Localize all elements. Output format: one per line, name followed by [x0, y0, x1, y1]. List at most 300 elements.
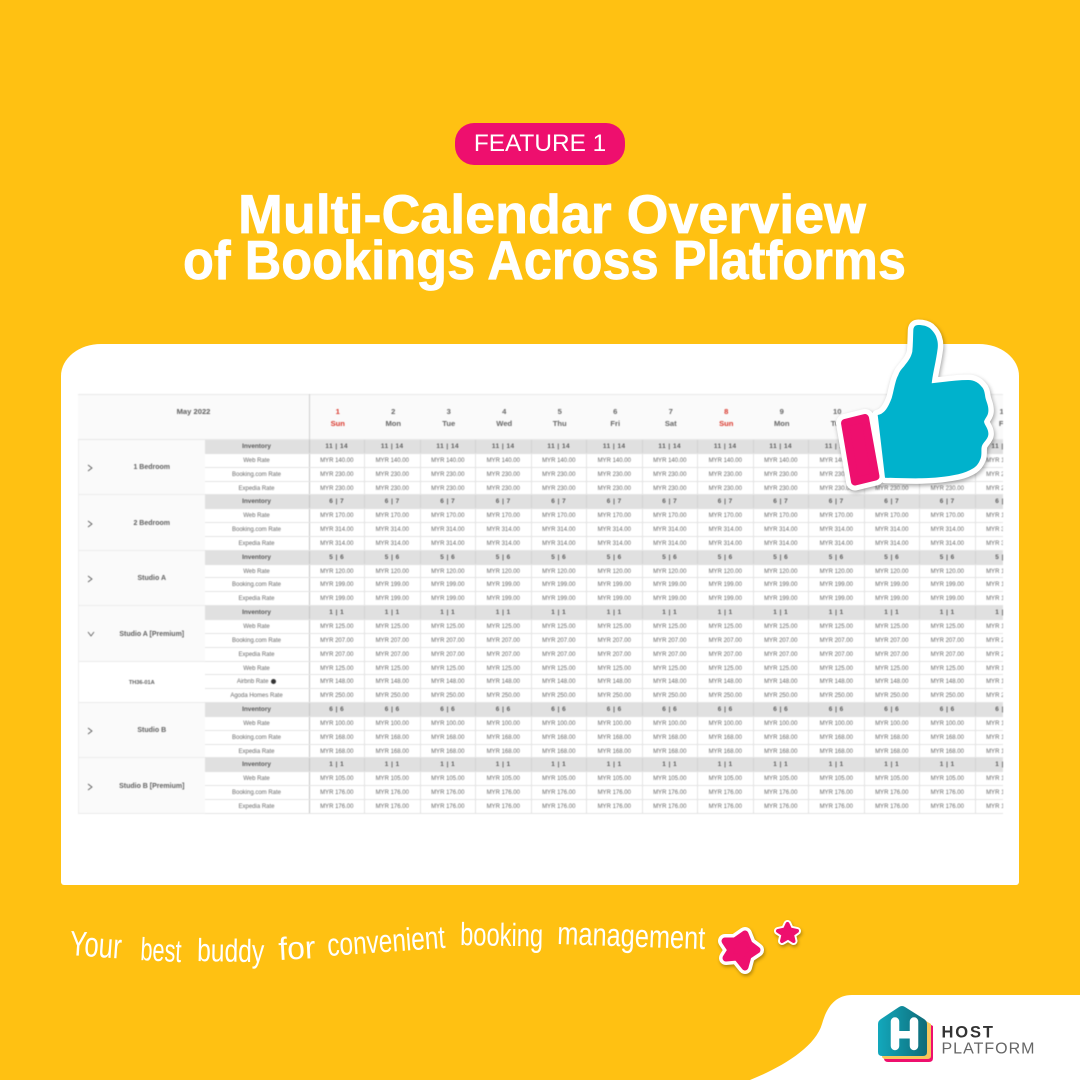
- room group: 2 Bedroom: 6 | 7: [718, 498, 733, 505]
- room group: Studio B Premium: MYR 176.00: [542, 804, 575, 810]
- room group: Studio B: MYR 100.00: [931, 721, 964, 727]
- room group: Studio A Premium: MYR 207.00: [431, 652, 464, 658]
- room group: Studio A: MYR 199.00: [598, 582, 631, 588]
- room group: 1 Bedroom: Expedia Rate: [238, 486, 275, 492]
- room group: 2 Bedroom: 2 Bedroom: [133, 520, 170, 527]
- room group: 1 Bedroom: MYR 140.00: [376, 458, 409, 464]
- room group: Studio A Premium: 1 | 1: [329, 609, 344, 616]
- room group: Studio A: MYR 199.00: [431, 582, 464, 588]
- room group: 1 Bedroom: 11 | 14: [436, 443, 459, 450]
- room group: Studio A: 5 | 6: [829, 554, 844, 561]
- room group: Studio A: MYR 199.00: [875, 582, 908, 588]
- room group: Studio B Premium: MYR 105.00: [431, 776, 464, 782]
- room group: 2 Bedroom: MYR 314.00: [875, 527, 908, 533]
- logo: Host Platform: HOST: [942, 1023, 993, 1041]
- room group: 1 Bedroom: MYR 230.00: [542, 472, 575, 478]
- room group: Studio A: 5 | 6: [773, 554, 788, 561]
- room group: Studio B: MYR 168.00: [542, 749, 575, 755]
- room group: Studio B: MYR 168.00: [376, 749, 409, 755]
- room group: Studio B Premium: MYR 105.00: [820, 776, 853, 782]
- room group: 1 Bedroom: MYR 230.00: [320, 472, 353, 478]
- room group: Studio B Premium: MYR 105.00: [598, 776, 631, 782]
- room group: 1 Bedroom: MYR 230.00: [376, 486, 409, 492]
- room group: Studio A: Booking.com Rate: [232, 582, 281, 588]
- room group: Studio A: MYR 199.00: [820, 582, 853, 588]
- room group: Studio B: MYR 168.00: [875, 735, 908, 741]
- room group: 1 Bedroom: 11 | 14: [381, 443, 404, 450]
- room group: Studio B: MYR 168.00: [875, 749, 908, 755]
- table header: Thu: [941, 418, 955, 428]
- room group: 1 Bedroom: MYR 140.00: [709, 458, 742, 464]
- room group: Studio B Premium: MYR 176.00: [487, 804, 520, 810]
- room group: Studio A Premium: MYR 207.00: [542, 652, 575, 658]
- room group: 2 Bedroom: 6 | 7: [940, 498, 955, 505]
- room group: TH36-01A: MYR 125.00: [764, 666, 797, 672]
- room group: Studio B: MYR 168.00: [931, 749, 964, 755]
- room group: Studio A Premium: MYR 125.00: [431, 624, 464, 630]
- room group: Studio A Premium: MYR 207.00: [653, 638, 686, 644]
- table header: Fri: [610, 418, 620, 428]
- room group: Studio A Premium: MYR 207.00: [931, 638, 964, 644]
- room group: TH36-01A: TH36-01A: [129, 680, 155, 686]
- room group: Studio B: [78, 702, 1004, 758]
- room group: TH36-01A: Airbnb Rate: [237, 679, 268, 685]
- table header: 7: [669, 407, 673, 416]
- room group: Studio A: MYR 120.00: [875, 569, 908, 575]
- room group: Studio B Premium: MYR 176.00: [653, 804, 686, 810]
- room group: Studio B: MYR 168.00: [653, 735, 686, 741]
- room group: Studio A Premium: MYR 207.00: [487, 652, 520, 658]
- table header: Wed: [885, 418, 901, 428]
- room group: Studio B: 6 | 6: [884, 706, 899, 713]
- room group: Studio B: Inventory: [242, 706, 271, 713]
- room group: 1 Bedroom: 1 Bedroom: [133, 464, 170, 471]
- room group: 1 Bedroom: MYR 230.00: [820, 486, 853, 492]
- room group: Studio A Premium: MYR 125.00: [875, 624, 908, 630]
- room group: Studio B: MYR 168.00: [764, 735, 797, 741]
- room group: Studio B Premium: MYR 176.00: [320, 804, 353, 810]
- room group: Studio A: MYR 120.00: [431, 569, 464, 575]
- room group: 2 Bedroom: MYR 314.00: [653, 527, 686, 533]
- room group: 1 Bedroom: MYR 230.00: [820, 472, 853, 478]
- room group: 1 Bedroom: MYR 140.00: [320, 458, 353, 464]
- room group: Studio A Premium: Web Rate: [243, 624, 270, 630]
- room group: TH36-01A: MYR 148.00: [875, 679, 908, 685]
- table header: Mon: [385, 418, 401, 428]
- room group: 2 Bedroom: MYR 314.00: [320, 541, 353, 547]
- room group: 1 Bedroom: MYR 230.00: [487, 486, 520, 492]
- room group: Studio B: MYR 100.00: [653, 721, 686, 727]
- room group: TH36-01A: MYR 148.00: [820, 679, 853, 685]
- room group: TH36-01A: MYR 148.00: [764, 679, 797, 685]
- room group: Studio A Premium: MYR 207.00: [320, 652, 353, 658]
- room group: 1 Bedroom: 11 | 14: [492, 443, 515, 450]
- room group: Studio A Premium: 1 | 1: [718, 609, 733, 616]
- room group: Studio B Premium: 1 | 1: [718, 761, 733, 768]
- room group: Studio B: MYR 100.00: [709, 721, 742, 727]
- room group: 2 Bedroom: MYR 314.00: [931, 541, 964, 547]
- title: of Bookings Across Platforms: [183, 229, 906, 291]
- room group: Studio B: MYR 100.00: [431, 721, 464, 727]
- room group: Studio A: MYR 120.00: [709, 569, 742, 575]
- room group: Studio A: 5 | 6: [551, 554, 566, 561]
- room group: TH36-01A: MYR 125.00: [487, 666, 520, 672]
- room group: 2 Bedroom: [78, 494, 1004, 552]
- room group: Studio A Premium: 1 | 1: [940, 609, 955, 616]
- title: [183, 183, 906, 291]
- room group: TH36-01A: MYR 125.00: [320, 666, 353, 672]
- panel: white card: [61, 344, 1019, 885]
- room group: 2 Bedroom: MYR 170.00: [653, 513, 686, 519]
- room group: Studio A: MYR 120.00: [542, 569, 575, 575]
- room group: TH36-01A: MYR 148.00: [431, 679, 464, 685]
- tagline: Your: [68, 924, 123, 967]
- logo: Host Platform: [878, 1006, 1034, 1062]
- room group: Studio A: MYR 120.00: [598, 569, 631, 575]
- room group: Studio B: 6 | 6: [662, 706, 677, 713]
- room group: Studio A Premium: Expedia Rate: [238, 652, 275, 658]
- room group: Studio A: MYR 120.00: [931, 569, 964, 575]
- room group: Studio B: MYR 168.00: [320, 749, 353, 755]
- room group: Studio B Premium: MYR 176.00: [820, 790, 853, 796]
- room group: TH36-01A: MYR 125.00: [653, 666, 686, 672]
- room group: Studio B: 6 | 6: [440, 706, 455, 713]
- room group: Studio A: MYR 120.00: [320, 569, 353, 575]
- room group: Studio A Premium: MYR 125.00: [487, 624, 520, 630]
- table header: Sun: [331, 418, 345, 428]
- room group: Studio B Premium: MYR 105.00: [320, 776, 353, 782]
- room group: Studio A: MYR 199.00: [764, 582, 797, 588]
- room group: 2 Bedroom: Web Rate: [243, 513, 270, 519]
- room group: Studio A: MYR 120.00: [376, 569, 409, 575]
- room group: 2 Bedroom: MYR 314.00: [487, 541, 520, 547]
- room group: 2 Bedroom: 6 | 7: [607, 498, 622, 505]
- room group: 1 Bedroom: MYR 140.00: [820, 458, 853, 464]
- room group: TH36-01A: MYR 125.00: [431, 666, 464, 672]
- room group: Studio B: MYR 168.00: [598, 735, 631, 741]
- room group: Studio A: MYR 199.00: [653, 582, 686, 588]
- table header: Wed: [496, 418, 512, 428]
- room group: 1 Bedroom: [78, 440, 1004, 496]
- room group: Studio B Premium: 1 | 1: [662, 761, 677, 768]
- room group: TH36-01A: MYR 250.00: [542, 693, 575, 699]
- room group: Studio A Premium: MYR 125.00: [542, 624, 575, 630]
- room group: 1 Bedroom: 11 | 14: [547, 443, 570, 450]
- room group: Studio B: 6 | 6: [496, 706, 511, 713]
- room group: TH36-01A: MYR 250.00: [376, 693, 409, 699]
- room group: Studio B Premium: 1 | 1: [440, 761, 455, 768]
- room group: Studio B Premium: MYR 176.00: [875, 790, 908, 796]
- room group: 1 Bedroom: MYR 230.00: [320, 486, 353, 492]
- room group: TH36-01A: MYR 125.00: [820, 666, 853, 672]
- room group: 2 Bedroom: MYR 314.00: [542, 541, 575, 547]
- room group: Studio A Premium: 1 | 1: [551, 609, 566, 616]
- room group: Studio A Premium: MYR 207.00: [542, 638, 575, 644]
- room group: TH36-01A: MYR 148.00: [931, 679, 964, 685]
- room group: TH36-01A: [78, 662, 1004, 704]
- room group: Studio A: Web Rate: [243, 569, 270, 575]
- room group: TH36-01A: MYR 250.00: [431, 693, 464, 699]
- room group: Studio B: 6 | 6: [829, 706, 844, 713]
- room group: Studio A: Studio A: [137, 575, 166, 582]
- room group: Studio B: 6 | 6: [718, 706, 733, 713]
- room group: 1 Bedroom: MYR 140.00: [653, 458, 686, 464]
- room group: 1 Bedroom: Web Rate: [243, 458, 270, 464]
- logo corner panel: [750, 995, 1080, 1080]
- room group: TH36-01A: MYR 125.00: [709, 666, 742, 672]
- room group: Studio B Premium: MYR 176.00: [875, 804, 908, 810]
- room group: Studio B Premium: MYR 176.00: [931, 790, 964, 796]
- room group: Studio B: MYR 168.00: [376, 735, 409, 741]
- room group: 1 Bedroom: 11 | 14: [825, 443, 848, 450]
- room group: Studio A: Expedia Rate: [238, 596, 275, 602]
- room group: Studio A Premium: MYR 125.00: [931, 624, 964, 630]
- room group: 1 Bedroom: MYR 230.00: [875, 472, 908, 478]
- room group: Studio B: MYR 100.00: [875, 721, 908, 727]
- room group: 2 Bedroom: Booking.com Rate: [232, 527, 281, 533]
- room group: Studio A Premium: 1 | 1: [496, 609, 511, 616]
- table header: Sun: [719, 418, 733, 428]
- room group: Studio B: MYR 100.00: [764, 721, 797, 727]
- room group: 1 Bedroom: MYR 140.00: [764, 458, 797, 464]
- room group: 2 Bedroom: MYR 314.00: [764, 541, 797, 547]
- room group: 1 Bedroom: 11 | 14: [325, 443, 348, 450]
- room group: 1 Bedroom: MYR 230.00: [598, 472, 631, 478]
- room group: TH36-01A: MYR 125.00: [598, 666, 631, 672]
- table header: 1: [336, 407, 340, 416]
- room group: Studio A Premium: Studio A [Premium]: [119, 631, 184, 638]
- room group: Studio B Premium: MYR 176.00: [598, 790, 631, 796]
- room group: TH36-01A: MYR 125.00: [542, 666, 575, 672]
- room group: TH36-01A: MYR 148.00: [320, 679, 353, 685]
- room group: Studio A Premium: MYR 207.00: [320, 638, 353, 644]
- room group: Studio A: MYR 120.00: [487, 569, 520, 575]
- room group: Studio B Premium: MYR 176.00: [764, 790, 797, 796]
- room group: 2 Bedroom: MYR 170.00: [598, 513, 631, 519]
- room group: 1 Bedroom: MYR 140.00: [487, 458, 520, 464]
- tagline: convenient: [326, 919, 446, 963]
- room group: Studio A Premium: MYR 125.00: [709, 624, 742, 630]
- room group: Studio B: MYR 168.00: [431, 749, 464, 755]
- tagline: for: [277, 929, 317, 967]
- room group: Studio B: MYR 168.00: [487, 735, 520, 741]
- room group: 2 Bedroom: 6 | 7: [551, 498, 566, 505]
- room group: Studio A: MYR 199.00: [653, 596, 686, 602]
- room group: 2 Bedroom: MYR 314.00: [709, 541, 742, 547]
- room group: TH36-01A: MYR 148.00: [598, 679, 631, 685]
- room group: Studio A Premium: MYR 207.00: [487, 638, 520, 644]
- room group: Studio A Premium: MYR 207.00: [875, 652, 908, 658]
- room group: Studio B: MYR 100.00: [376, 721, 409, 727]
- room group: 1 Bedroom: MYR 230.00: [931, 472, 964, 478]
- room group: Studio A: 5 | 6: [662, 554, 677, 561]
- room group: Studio B: MYR 100.00: [487, 721, 520, 727]
- room group: Studio B: MYR 168.00: [487, 749, 520, 755]
- room group: Studio A Premium: MYR 125.00: [653, 624, 686, 630]
- logo: Host Platform: PLATFORM: [942, 1040, 1034, 1058]
- room group: Studio A: 5 | 6: [940, 554, 955, 561]
- room group: 2 Bedroom: 6 | 7: [662, 498, 677, 505]
- room group: Studio B Premium: MYR 176.00: [376, 804, 409, 810]
- feature badge: FEATURE 1: [474, 130, 606, 157]
- room group: Studio B: MYR 168.00: [764, 749, 797, 755]
- table header: May 2022: [177, 407, 210, 416]
- room group: Studio A Premium: MYR 207.00: [875, 638, 908, 644]
- room group: Studio B Premium: Booking.com Rate: [232, 790, 281, 796]
- room group: Studio B: MYR 168.00: [931, 735, 964, 741]
- room group: Studio A: MYR 199.00: [709, 596, 742, 602]
- room group: TH36-01A: MYR 250.00: [931, 693, 964, 699]
- room group: 2 Bedroom: 6 | 7: [440, 498, 455, 505]
- room group: Studio B Premium: MYR 105.00: [709, 776, 742, 782]
- room group: 2 Bedroom: MYR 170.00: [376, 513, 409, 519]
- room group: 2 Bedroom: MYR 314.00: [598, 527, 631, 533]
- room group: Studio A Premium: 1 | 1: [829, 609, 844, 616]
- room group: Studio A: [78, 550, 1004, 606]
- room group: 2 Bedroom: MYR 314.00: [431, 541, 464, 547]
- room group: Studio B: 6 | 6: [940, 706, 955, 713]
- room group: Studio B Premium: MYR 105.00: [875, 776, 908, 782]
- room group: TH36-01A: Agoda Homes Rate: [230, 693, 283, 699]
- table header: 3: [447, 407, 451, 416]
- tagline: booking: [460, 916, 543, 953]
- table header: 12: [944, 407, 952, 416]
- room group: TH36-01A: MYR 148.00: [487, 679, 520, 685]
- room group: 2 Bedroom: 6 | 7: [773, 498, 788, 505]
- room group: TH36-01A: MYR 250.00: [820, 693, 853, 699]
- room group: Studio A: MYR 199.00: [487, 596, 520, 602]
- tagline: [68, 915, 706, 969]
- room group: 1 Bedroom: MYR 230.00: [431, 486, 464, 492]
- room group: Studio B: MYR 168.00: [653, 749, 686, 755]
- room group: Studio A: MYR 199.00: [542, 596, 575, 602]
- room group: Studio B Premium: MYR 105.00: [487, 776, 520, 782]
- room group: 2 Bedroom: 6 | 7: [385, 498, 400, 505]
- room group: Studio B Premium: MYR 176.00: [320, 790, 353, 796]
- room group: Studio A: MYR 199.00: [320, 582, 353, 588]
- table header: Tue: [442, 418, 455, 428]
- room group: Studio A Premium: MYR 125.00: [376, 624, 409, 630]
- room group: 1 Bedroom: 11 | 14: [603, 443, 626, 450]
- room group: Studio A Premium: MYR 125.00: [320, 624, 353, 630]
- room group: Studio A: MYR 199.00: [598, 596, 631, 602]
- room group: 2 Bedroom: MYR 314.00: [931, 527, 964, 533]
- room group: Studio A: MYR 120.00: [653, 569, 686, 575]
- room group: Studio B Premium: MYR 176.00: [376, 790, 409, 796]
- table header: Tue: [831, 418, 844, 428]
- room group: 1 Bedroom: Booking.com Rate: [232, 472, 281, 478]
- room group: 2 Bedroom: MYR 170.00: [709, 513, 742, 519]
- room group: Studio A: MYR 199.00: [376, 582, 409, 588]
- room group: Studio B Premium: MYR 105.00: [764, 776, 797, 782]
- room group: Studio A Premium: MYR 207.00: [931, 652, 964, 658]
- room group: Studio B Premium: 1 | 1: [773, 761, 788, 768]
- table header: 10: [833, 407, 841, 416]
- room group: Studio A: MYR 199.00: [875, 596, 908, 602]
- room group: Studio B Premium: MYR 105.00: [376, 776, 409, 782]
- room group: 2 Bedroom: MYR 314.00: [542, 527, 575, 533]
- room group: Studio A Premium: Inventory: [242, 609, 271, 616]
- room group: Studio A Premium: MYR 125.00: [820, 624, 853, 630]
- room group: Studio A Premium: 1 | 1: [607, 609, 622, 616]
- room group: 1 Bedroom: MYR 230.00: [709, 486, 742, 492]
- room group: Studio B Premium: MYR 176.00: [653, 790, 686, 796]
- room group: Studio A: MYR 199.00: [431, 596, 464, 602]
- room group: Studio B: Booking.com Rate: [232, 735, 281, 741]
- room group: Studio A: MYR 120.00: [820, 569, 853, 575]
- room group: Studio B: MYR 100.00: [820, 721, 853, 727]
- room group: 1 Bedroom: MYR 230.00: [764, 486, 797, 492]
- room group: Studio A: 5 | 6: [385, 554, 400, 561]
- room group: 1 Bedroom: MYR 230.00: [764, 472, 797, 478]
- room group: 1 Bedroom: MYR 140.00: [598, 458, 631, 464]
- room group: Studio B Premium: MYR 176.00: [487, 790, 520, 796]
- room group: TH36-01A: MYR 148.00: [653, 679, 686, 685]
- room group: 1 Bedroom: MYR 230.00: [653, 472, 686, 478]
- room group: Studio B: Web Rate: [243, 721, 270, 727]
- room group: Studio A: 5 | 6: [607, 554, 622, 561]
- room group: 2 Bedroom: MYR 314.00: [820, 527, 853, 533]
- room group: 1 Bedroom: MYR 230.00: [875, 486, 908, 492]
- table header: 8: [724, 407, 728, 416]
- room group: 1 Bedroom: 11 | 14: [714, 443, 737, 450]
- room group: Studio B: MYR 168.00: [320, 735, 353, 741]
- room group: 1 Bedroom: MYR 140.00: [875, 458, 908, 464]
- room group: Studio B Premium: MYR 176.00: [764, 804, 797, 810]
- room group: 1 Bedroom: 11 | 14: [880, 443, 903, 450]
- room group: Studio A: MYR 199.00: [820, 596, 853, 602]
- room group: 2 Bedroom: MYR 314.00: [376, 541, 409, 547]
- room group: 2 Bedroom: MYR 314.00: [376, 527, 409, 533]
- room group: Studio B: MYR 100.00: [320, 721, 353, 727]
- icon: stars: [717, 920, 804, 978]
- room group: 1 Bedroom: MYR 140.00: [431, 458, 464, 464]
- room group: Studio B Premium: Web Rate: [243, 776, 270, 782]
- table header: 6: [613, 407, 617, 416]
- room group: TH36-01A: MYR 250.00: [875, 693, 908, 699]
- room group: Studio A Premium: MYR 207.00: [376, 638, 409, 644]
- room group: Studio B: MYR 168.00: [820, 735, 853, 741]
- room group: Studio A Premium: 1 | 1: [773, 609, 788, 616]
- room group: TH36-01A: MYR 125.00: [931, 666, 964, 672]
- room group: 1 Bedroom: MYR 230.00: [653, 486, 686, 492]
- room group: 1 Bedroom: MYR 140.00: [931, 458, 964, 464]
- room group: 1 Bedroom: 11 | 14: [936, 443, 959, 450]
- room group: 1 Bedroom: 11 | 14: [658, 443, 681, 450]
- room group: Studio A Premium: 1 | 1: [440, 609, 455, 616]
- title: Multi-Calendar Overview: [238, 183, 866, 245]
- room group: Studio B Premium: MYR 176.00: [820, 804, 853, 810]
- room group: Studio B: MYR 168.00: [709, 735, 742, 741]
- room group: Studio B Premium: Studio B [Premium]: [119, 783, 184, 790]
- feature badge: [455, 123, 625, 165]
- room group: Studio A Premium: 1 | 1: [884, 609, 899, 616]
- room group: Studio A Premium: MYR 207.00: [431, 638, 464, 644]
- room group: Studio A: 5 | 6: [496, 554, 511, 561]
- room group: Studio B Premium: 1 | 1: [940, 761, 955, 768]
- room group: Studio A Premium: MYR 207.00: [653, 652, 686, 658]
- room group: TH36-01A: MYR 148.00: [376, 679, 409, 685]
- room group: 1 Bedroom: MYR 230.00: [487, 472, 520, 478]
- room group: TH36-01A: MYR 125.00: [875, 666, 908, 672]
- room group: 2 Bedroom: MYR 314.00: [764, 527, 797, 533]
- room group: Studio A Premium: MYR 207.00: [820, 652, 853, 658]
- room group: 2 Bedroom: Inventory: [242, 498, 271, 505]
- room group: Studio B Premium: 1 | 1: [329, 761, 344, 768]
- room group: Studio B: MYR 100.00: [542, 721, 575, 727]
- room group: 2 Bedroom: MYR 170.00: [487, 513, 520, 519]
- room group: 2 Bedroom: MYR 314.00: [653, 541, 686, 547]
